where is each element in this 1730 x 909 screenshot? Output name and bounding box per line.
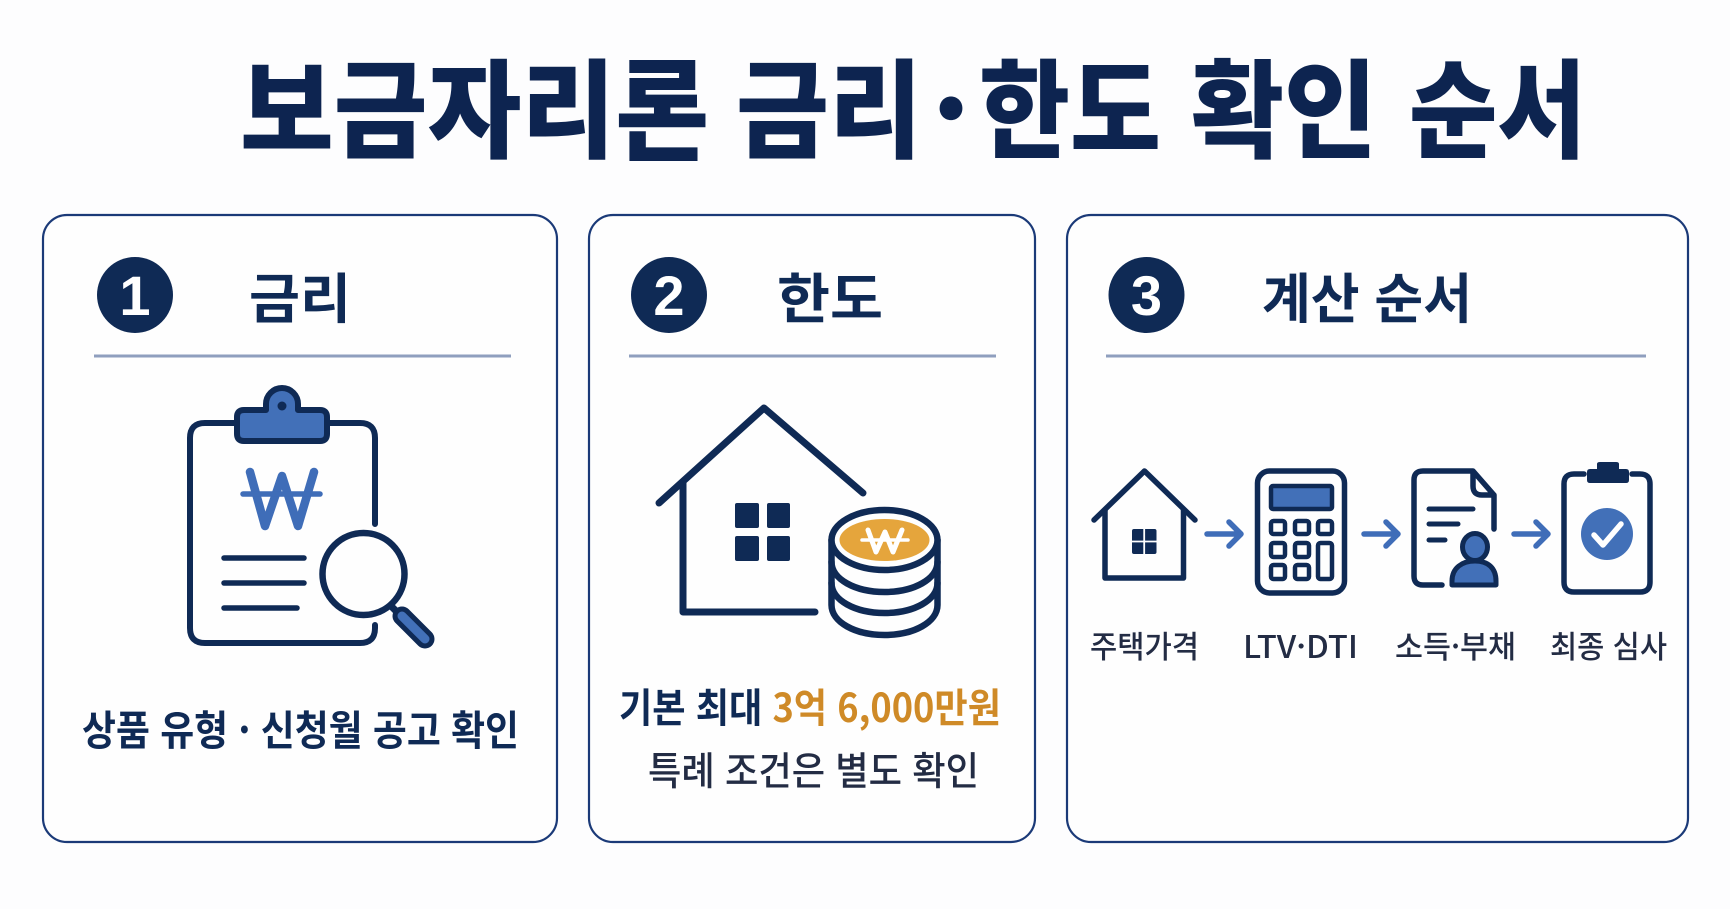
panel frame <box>43 215 557 842</box>
panel: 계산 순서 <box>1067 215 1688 842</box>
heading: 한도: 한도 <box>777 255 883 334</box>
panel frame <box>1067 215 1688 842</box>
title: 한도 <box>979 25 1161 180</box>
icon: house <box>1094 471 1195 578</box>
step badge 3: 3 <box>1131 264 1162 327</box>
title: 확인 <box>1191 25 1377 180</box>
caption: 상품 유형: 상품 유형 · 신청월 공고 확인 <box>82 697 519 757</box>
label: 주택가격: 주택가격 <box>1090 622 1199 667</box>
heading: 계산 순서: 계산 순서 <box>1262 255 1472 334</box>
panel: 금리 <box>43 215 557 842</box>
panel frame <box>589 215 1035 842</box>
step badge 2 <box>631 257 707 333</box>
arrow <box>1207 522 1241 546</box>
label: 소득·부채: 소득·부채 <box>1395 622 1516 667</box>
step badge 1: 1 <box>119 264 151 327</box>
heading: 금리: 금리 <box>249 255 351 334</box>
label: 최종 심사: 최종 심사 <box>1550 622 1667 667</box>
arrow <box>1364 522 1398 546</box>
step badge 2: 2 <box>653 264 685 327</box>
icon: document with person <box>1414 471 1496 585</box>
title: 순서 <box>1409 25 1586 180</box>
icon: clipboard with won sign and magnifier <box>190 388 425 643</box>
caption: 기본 최대 3억 6,000만원: 기본 최대 3억 6,000만원 <box>619 676 1001 734</box>
label: LTV·DTI: LTV·DTI <box>1243 622 1358 667</box>
icon: house <box>659 408 863 612</box>
step badge 1 <box>97 257 173 333</box>
caption: 특례 조건은 별도 확인: 특례 조건은 별도 확인 <box>648 741 979 797</box>
title <box>240 25 1586 180</box>
icon: won coin stack <box>832 510 938 635</box>
step badge 3 <box>1108 257 1184 333</box>
title: 보금자리론 <box>240 25 709 180</box>
title: 금리 <box>736 25 922 180</box>
icon: calculator <box>1258 471 1344 593</box>
title: · <box>932 25 970 180</box>
icon: clipboard with check <box>1564 462 1650 592</box>
panel: 한도 <box>589 215 1035 842</box>
arrow <box>1514 522 1548 546</box>
